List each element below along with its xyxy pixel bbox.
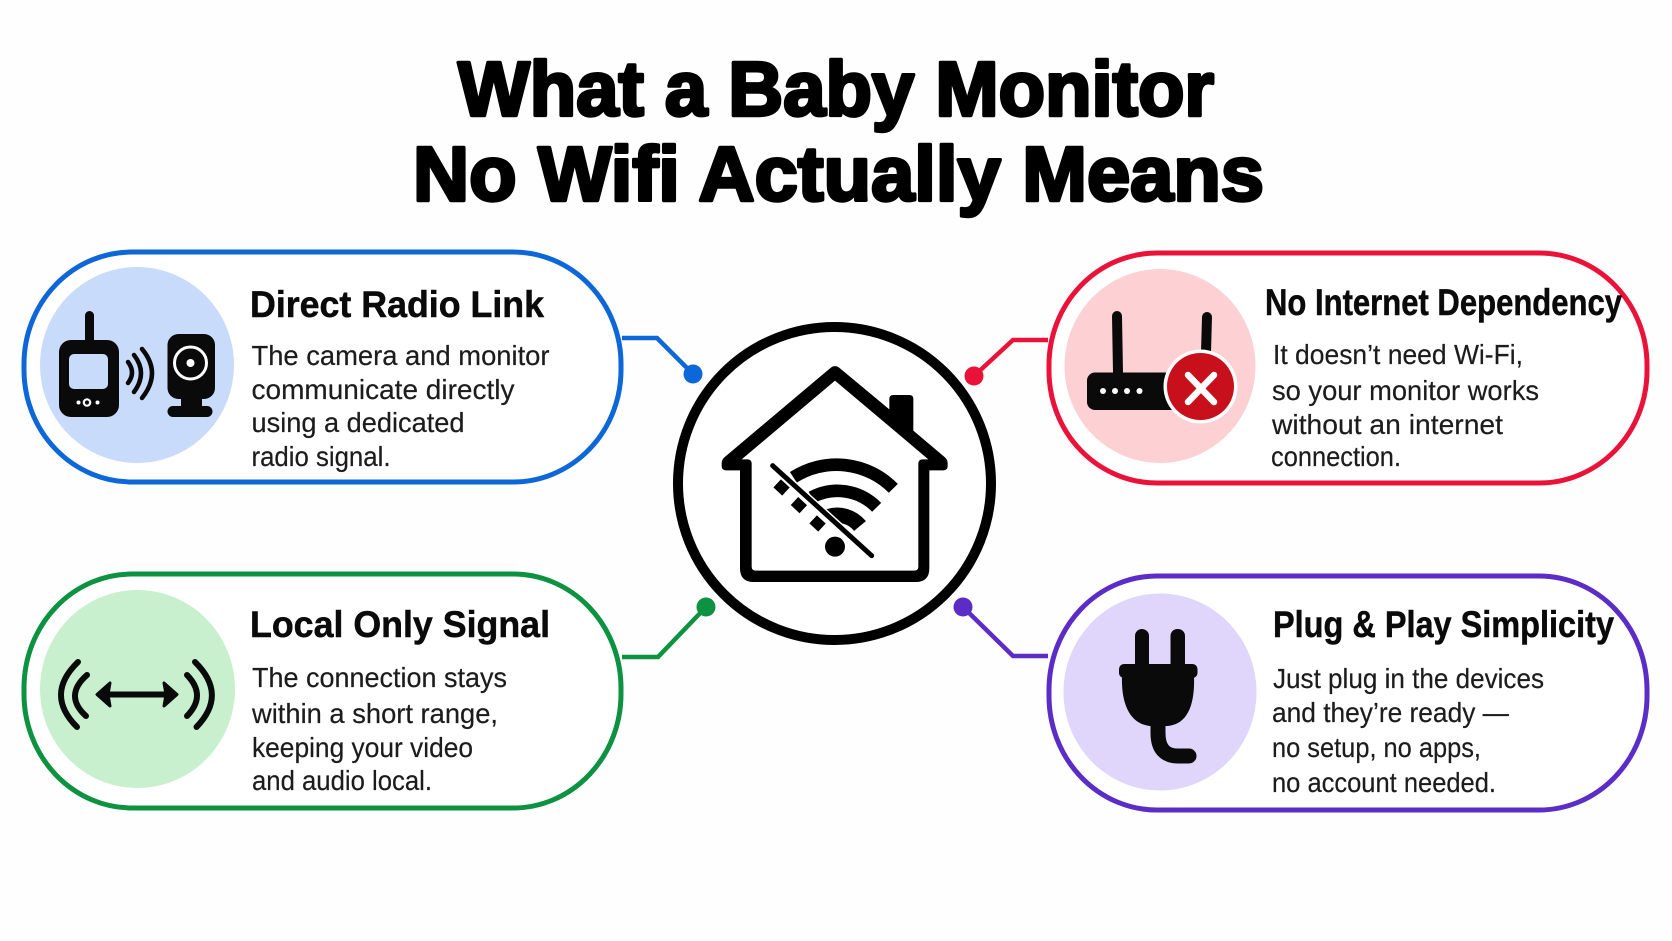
icon: monitor and camera	[40, 267, 234, 463]
text block: radio signal.	[252, 441, 390, 472]
text block: The camera and monitor	[252, 340, 550, 371]
text block	[1271, 339, 1539, 472]
text block: without an internet	[1271, 409, 1503, 440]
text block: and they’re ready —	[1272, 697, 1509, 728]
center icon: house with crossed-out wifi	[678, 327, 991, 640]
text block: using a dedicated	[252, 407, 464, 438]
text block: The connection stays	[252, 662, 507, 693]
icon: local signal arrow	[40, 590, 235, 788]
wifi symbol	[773, 465, 893, 556]
text block: no account needed.	[1272, 767, 1496, 798]
text block	[251, 662, 507, 796]
icon: power plug	[1064, 594, 1256, 790]
text block: within a short range,	[251, 698, 498, 729]
connector: red	[964, 340, 1048, 386]
connector: blue	[622, 338, 702, 384]
text block: Just plug in the devices	[1273, 663, 1544, 694]
text block	[252, 340, 550, 472]
connector: green	[622, 598, 716, 657]
icon: router with error badge	[1064, 269, 1256, 463]
title	[413, 46, 1264, 218]
text block: no setup, no apps,	[1272, 732, 1481, 763]
text block: It doesn’t need Wi-Fi,	[1273, 339, 1523, 370]
house	[722, 366, 948, 582]
text block: communicate directly	[252, 374, 515, 405]
panel: plug and play simplicity	[1049, 576, 1647, 810]
text block: and audio local.	[252, 765, 432, 796]
panel: direct radio link	[24, 252, 621, 482]
text block	[1272, 663, 1544, 798]
panel: local only signal	[24, 574, 621, 808]
text block: connection.	[1271, 441, 1401, 472]
text block: so your monitor works	[1272, 375, 1539, 406]
title: No Wifi Actually Means	[413, 132, 1264, 218]
connector: purple	[954, 598, 1048, 656]
heading: Plug & Play Simplicity	[1273, 604, 1614, 645]
panel: no internet dependency	[1049, 253, 1647, 483]
heading: Local Only Signal	[250, 604, 550, 645]
title: What a Baby Monitor	[458, 46, 1214, 132]
heading: Direct Radio Link	[250, 284, 544, 325]
text block: keeping your video	[252, 732, 473, 763]
